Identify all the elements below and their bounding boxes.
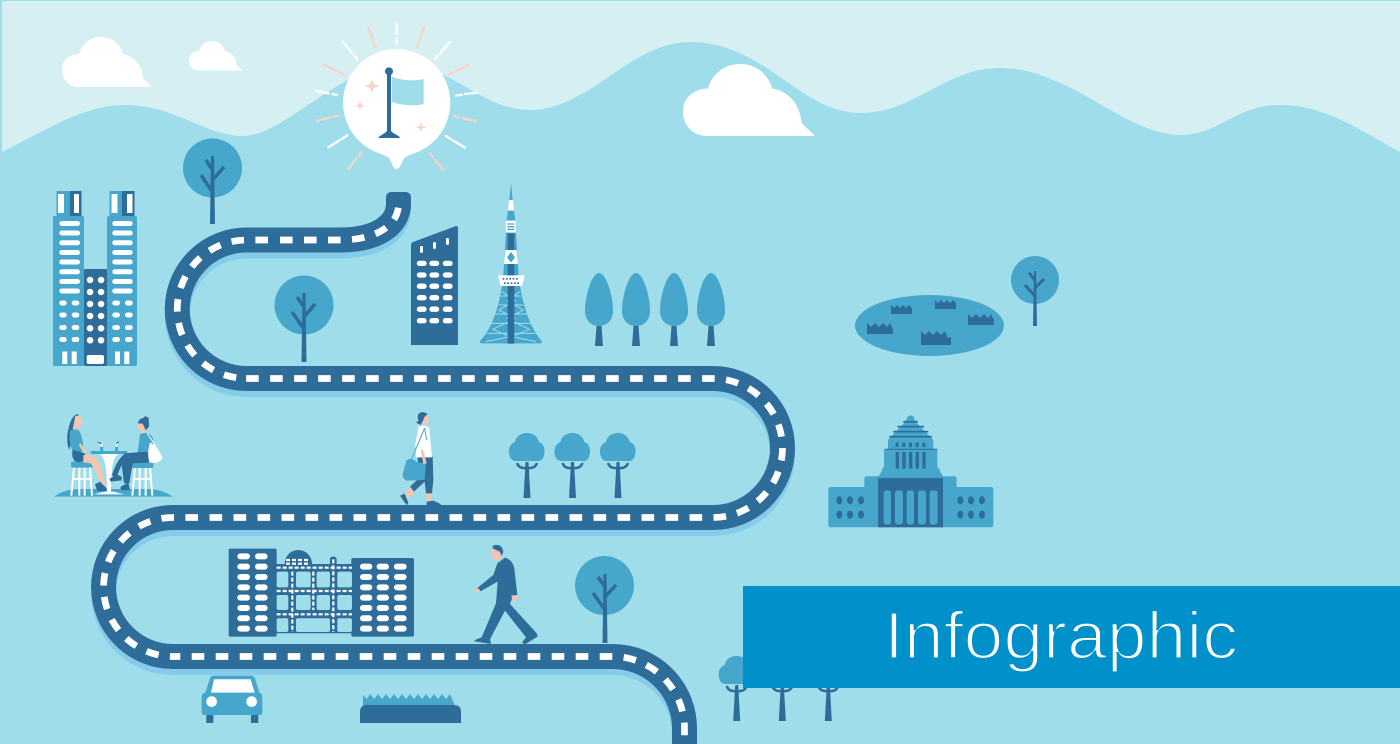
portico xyxy=(878,478,943,527)
goal flag bubble xyxy=(317,23,477,170)
road shadow xyxy=(104,206,783,744)
dome xyxy=(878,415,943,477)
banner title: Infographic xyxy=(884,598,1238,674)
tower legs xyxy=(480,286,542,343)
windows xyxy=(240,556,404,629)
poplar trees xyxy=(585,273,725,346)
tote bag xyxy=(148,442,163,463)
tower tops xyxy=(56,191,82,216)
table xyxy=(91,451,127,454)
drinks xyxy=(102,443,117,451)
woman right xyxy=(109,416,163,490)
sky xyxy=(2,1,1400,201)
left edge strip xyxy=(0,0,2,152)
walking man xyxy=(474,545,538,644)
left and right blocks xyxy=(229,549,277,637)
tree xyxy=(554,433,590,498)
tree xyxy=(772,685,792,721)
station building xyxy=(229,549,414,637)
lane dashes xyxy=(104,204,783,744)
national diet building xyxy=(828,415,993,527)
road xyxy=(104,192,783,744)
cloud small xyxy=(189,41,242,70)
car xyxy=(202,676,262,723)
factory island xyxy=(855,295,1004,356)
wings xyxy=(828,476,993,527)
tokyo tower xyxy=(480,183,542,344)
slanted building xyxy=(411,226,458,345)
tree mid xyxy=(274,276,334,362)
twin towers xyxy=(53,191,137,366)
bubble xyxy=(343,49,450,169)
pole xyxy=(378,73,400,138)
windows xyxy=(62,224,130,340)
cloud large xyxy=(683,64,815,136)
road body xyxy=(104,200,783,744)
tree right xyxy=(1011,256,1059,326)
peach rays xyxy=(317,27,476,170)
ground xyxy=(54,489,173,497)
walking woman xyxy=(400,412,441,505)
flag xyxy=(392,77,424,105)
poplar 3 xyxy=(660,273,688,346)
tree lower xyxy=(575,556,634,643)
cloud trees row xyxy=(509,433,636,498)
white rays xyxy=(317,23,477,148)
cloud left xyxy=(62,37,152,87)
grid cells xyxy=(277,572,352,632)
tree xyxy=(818,685,838,721)
tree xyxy=(719,656,754,721)
poplar 1 xyxy=(585,273,613,346)
tree xyxy=(600,433,636,498)
woman left xyxy=(67,414,107,491)
poplar 2 xyxy=(622,273,650,346)
stools xyxy=(71,468,152,496)
poplar 4 xyxy=(697,273,725,346)
banner xyxy=(743,586,1400,688)
wing windows xyxy=(836,496,985,519)
tree xyxy=(509,433,544,498)
tower bodies xyxy=(53,216,84,366)
cafe scene xyxy=(54,414,173,497)
cloud trees bottom xyxy=(719,656,838,721)
grid dashes xyxy=(277,559,352,632)
hedge xyxy=(360,694,461,723)
station circle xyxy=(285,550,312,577)
tree top xyxy=(183,138,242,224)
central block xyxy=(276,557,352,633)
sparkles xyxy=(355,79,426,133)
